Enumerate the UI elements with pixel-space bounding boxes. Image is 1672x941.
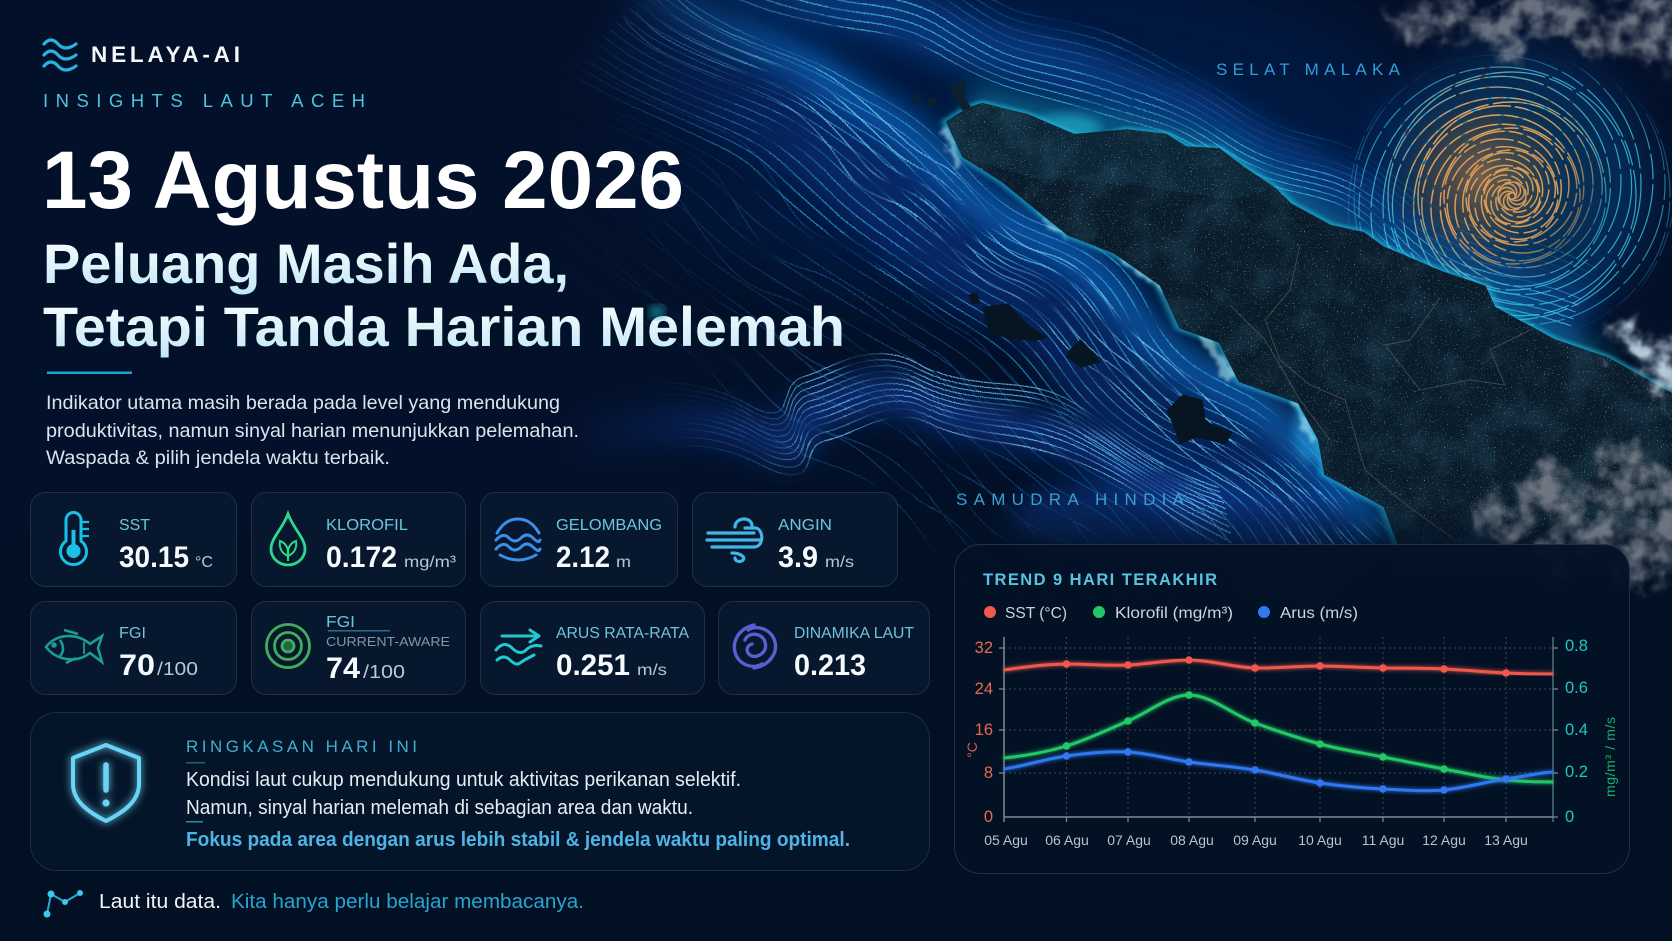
left axis labels: 16: [975, 721, 993, 739]
map: ocean currents and Aceh land: [572, 0, 1672, 598]
subtitle: INSIGHTS LAUT ACEH: [43, 90, 365, 111]
x axis labels: 07 Agu: [1107, 832, 1151, 848]
card: Klorofil: 0.172: [326, 541, 397, 574]
card: Klorofil: [252, 492, 466, 586]
legend: Klorofil (mg/m³): [1115, 605, 1233, 622]
left axis labels: 24: [975, 680, 993, 698]
icon: wind: [707, 519, 762, 561]
icon: waves: [496, 519, 540, 560]
footer tagline: [44, 890, 584, 918]
title: date: 13 Agustus 2026: [42, 135, 684, 226]
card: Dinamika laut: [718, 602, 930, 694]
intro text: Indikator utama masih berada pada level yang mendukung: [46, 392, 560, 414]
right axis labels: 0.8: [1565, 637, 1588, 655]
left axis labels: 0: [984, 808, 993, 826]
right axis labels: 0.6: [1565, 679, 1588, 697]
chart heading: TREND 9 HARI TERAKHIR: [983, 571, 1217, 589]
intro text: [46, 392, 579, 469]
intro text: produktivitas, namun sinyal harian menunjukkan pelemahan.: [46, 420, 579, 442]
legend: SST (°C): [1005, 605, 1067, 622]
footer tagline: Laut itu data.: [99, 891, 221, 913]
left axis labels: 8: [984, 764, 993, 782]
left axis labels: [975, 639, 993, 826]
series: SST: [1004, 656, 1553, 677]
footer tagline: Kita hanya perlu belajar membacanya.: [231, 891, 584, 913]
divider accent: [47, 372, 132, 374]
card: SST: SST: [119, 517, 151, 534]
headline: Peluang Masih Ada,: [43, 232, 569, 295]
panel: ringkasan hari ini: Fokus pada area dengan arus lebih stabil & jendela waktu paling optimal.: [186, 829, 850, 851]
right axis labels: 0: [1565, 808, 1574, 826]
current streamlines: [424, 0, 1607, 756]
icon: fish: [46, 630, 102, 663]
grid: [1004, 637, 1553, 817]
summary heading: RINGKASAN HARI INI: [186, 737, 417, 756]
card: Angin: ANGIN: [778, 517, 832, 534]
series: Klorofil: [1004, 691, 1553, 782]
x axis labels: 09 Agu: [1233, 832, 1277, 848]
x axis labels: 10 Agu: [1298, 832, 1342, 848]
card: Angin: 3.9: [778, 541, 818, 574]
card: Arus rata-rata: [480, 602, 704, 694]
x axis labels: 13 Agu: [1484, 832, 1528, 848]
map label: Samudra Hindia: SAMUDRA HINDIA: [956, 490, 1185, 509]
card: Arus rata-rata: 0.251: [556, 649, 630, 682]
card: Arus rata-rata: m/s: [637, 662, 667, 679]
right axis labels: [1565, 637, 1588, 826]
icon: shield: [73, 745, 139, 821]
x axis labels: 11 Agu: [1362, 832, 1404, 848]
icon: data path: [44, 890, 83, 918]
card: FGI: [30, 602, 236, 694]
x axis labels: 12 Agu: [1422, 832, 1466, 848]
headline: Tetapi Tanda Harian Melemah: [43, 295, 845, 358]
coast glow: [946, 103, 1672, 571]
card: SST: 30.15: [119, 541, 189, 574]
card: Dinamika laut: 0.213: [794, 649, 866, 682]
card: SST: °C: [195, 554, 213, 571]
legend: [984, 605, 1358, 622]
headline: [43, 232, 845, 358]
panel: ringkasan hari ini: Namun, sinyal harian melemah di sebagian area dan waktu.: [186, 797, 693, 819]
card: Gelombang: m: [616, 554, 631, 571]
panel: trend chart: [954, 544, 1630, 874]
card: Klorofil: KLOROFIL: [326, 517, 408, 534]
x axis labels: 08 Agu: [1170, 832, 1214, 848]
card: Klorofil: mg/m³: [404, 554, 457, 571]
card: Dinamika laut: DINAMIKA LAUT: [794, 625, 915, 642]
bottom fade: [0, 500, 1672, 610]
eddy swirl: [1348, 54, 1672, 330]
card: Gelombang: GELOMBANG: [556, 517, 662, 534]
card: FGI Current-Aware: 74: [326, 652, 360, 685]
icon: swirl: [734, 625, 776, 668]
card: FGI Current-Aware: FGI: [326, 614, 355, 631]
right axis labels: 0.2: [1565, 763, 1588, 781]
card: FGI Current-Aware: [252, 602, 466, 694]
icon: drop: [271, 514, 305, 565]
card: FGI: 70: [119, 649, 155, 682]
card: Angin: m/s: [825, 554, 854, 571]
brand name: NELAYA-AI: [91, 42, 240, 67]
right axis title: mg/m³ / m/s: [1602, 717, 1618, 797]
intro text: Waspada & pilih jendela waktu terbaik.: [46, 447, 390, 469]
x axis labels: [984, 832, 1528, 848]
panel: ringkasan hari ini: [30, 712, 930, 870]
right axis labels: 0.4: [1565, 721, 1588, 739]
clouds: [1400, 0, 1672, 586]
card: SST: [30, 492, 236, 586]
left fade: [0, 0, 820, 560]
card: Gelombang: 2.12: [556, 541, 610, 574]
card: FGI Current-Aware: CURRENT-AWARE: [326, 634, 450, 649]
icon: target: [266, 624, 310, 668]
card: Gelombang: [480, 492, 678, 586]
map label: Selat Malaka: SELAT MALAKA: [1216, 60, 1401, 79]
card: Angin: [692, 492, 898, 586]
x axis labels: 05 Agu: [984, 832, 1028, 848]
land: [914, 82, 1672, 571]
icon: thermometer: [60, 512, 89, 565]
left axis title: °C: [964, 742, 980, 758]
left axis labels: 32: [975, 639, 993, 657]
series: Arus: [1004, 748, 1553, 794]
logo icon: [44, 40, 76, 70]
icon: current arrows: [496, 630, 541, 664]
land texture: [946, 104, 1672, 571]
card: FGI: /100: [157, 659, 198, 679]
card: FGI: FGI: [119, 625, 146, 642]
card: Arus rata-rata: ARUS RATA-RATA: [556, 625, 690, 642]
legend: Arus (m/s): [1280, 605, 1358, 622]
coastal foam: [946, 130, 1312, 440]
summary text: Kondisi laut cukup mendukung untuk aktivitas perikanan selektif.: [186, 769, 741, 791]
x axis labels: 06 Agu: [1045, 832, 1089, 848]
axes: [999, 637, 1558, 822]
card: FGI Current-Aware: /100: [363, 662, 405, 682]
